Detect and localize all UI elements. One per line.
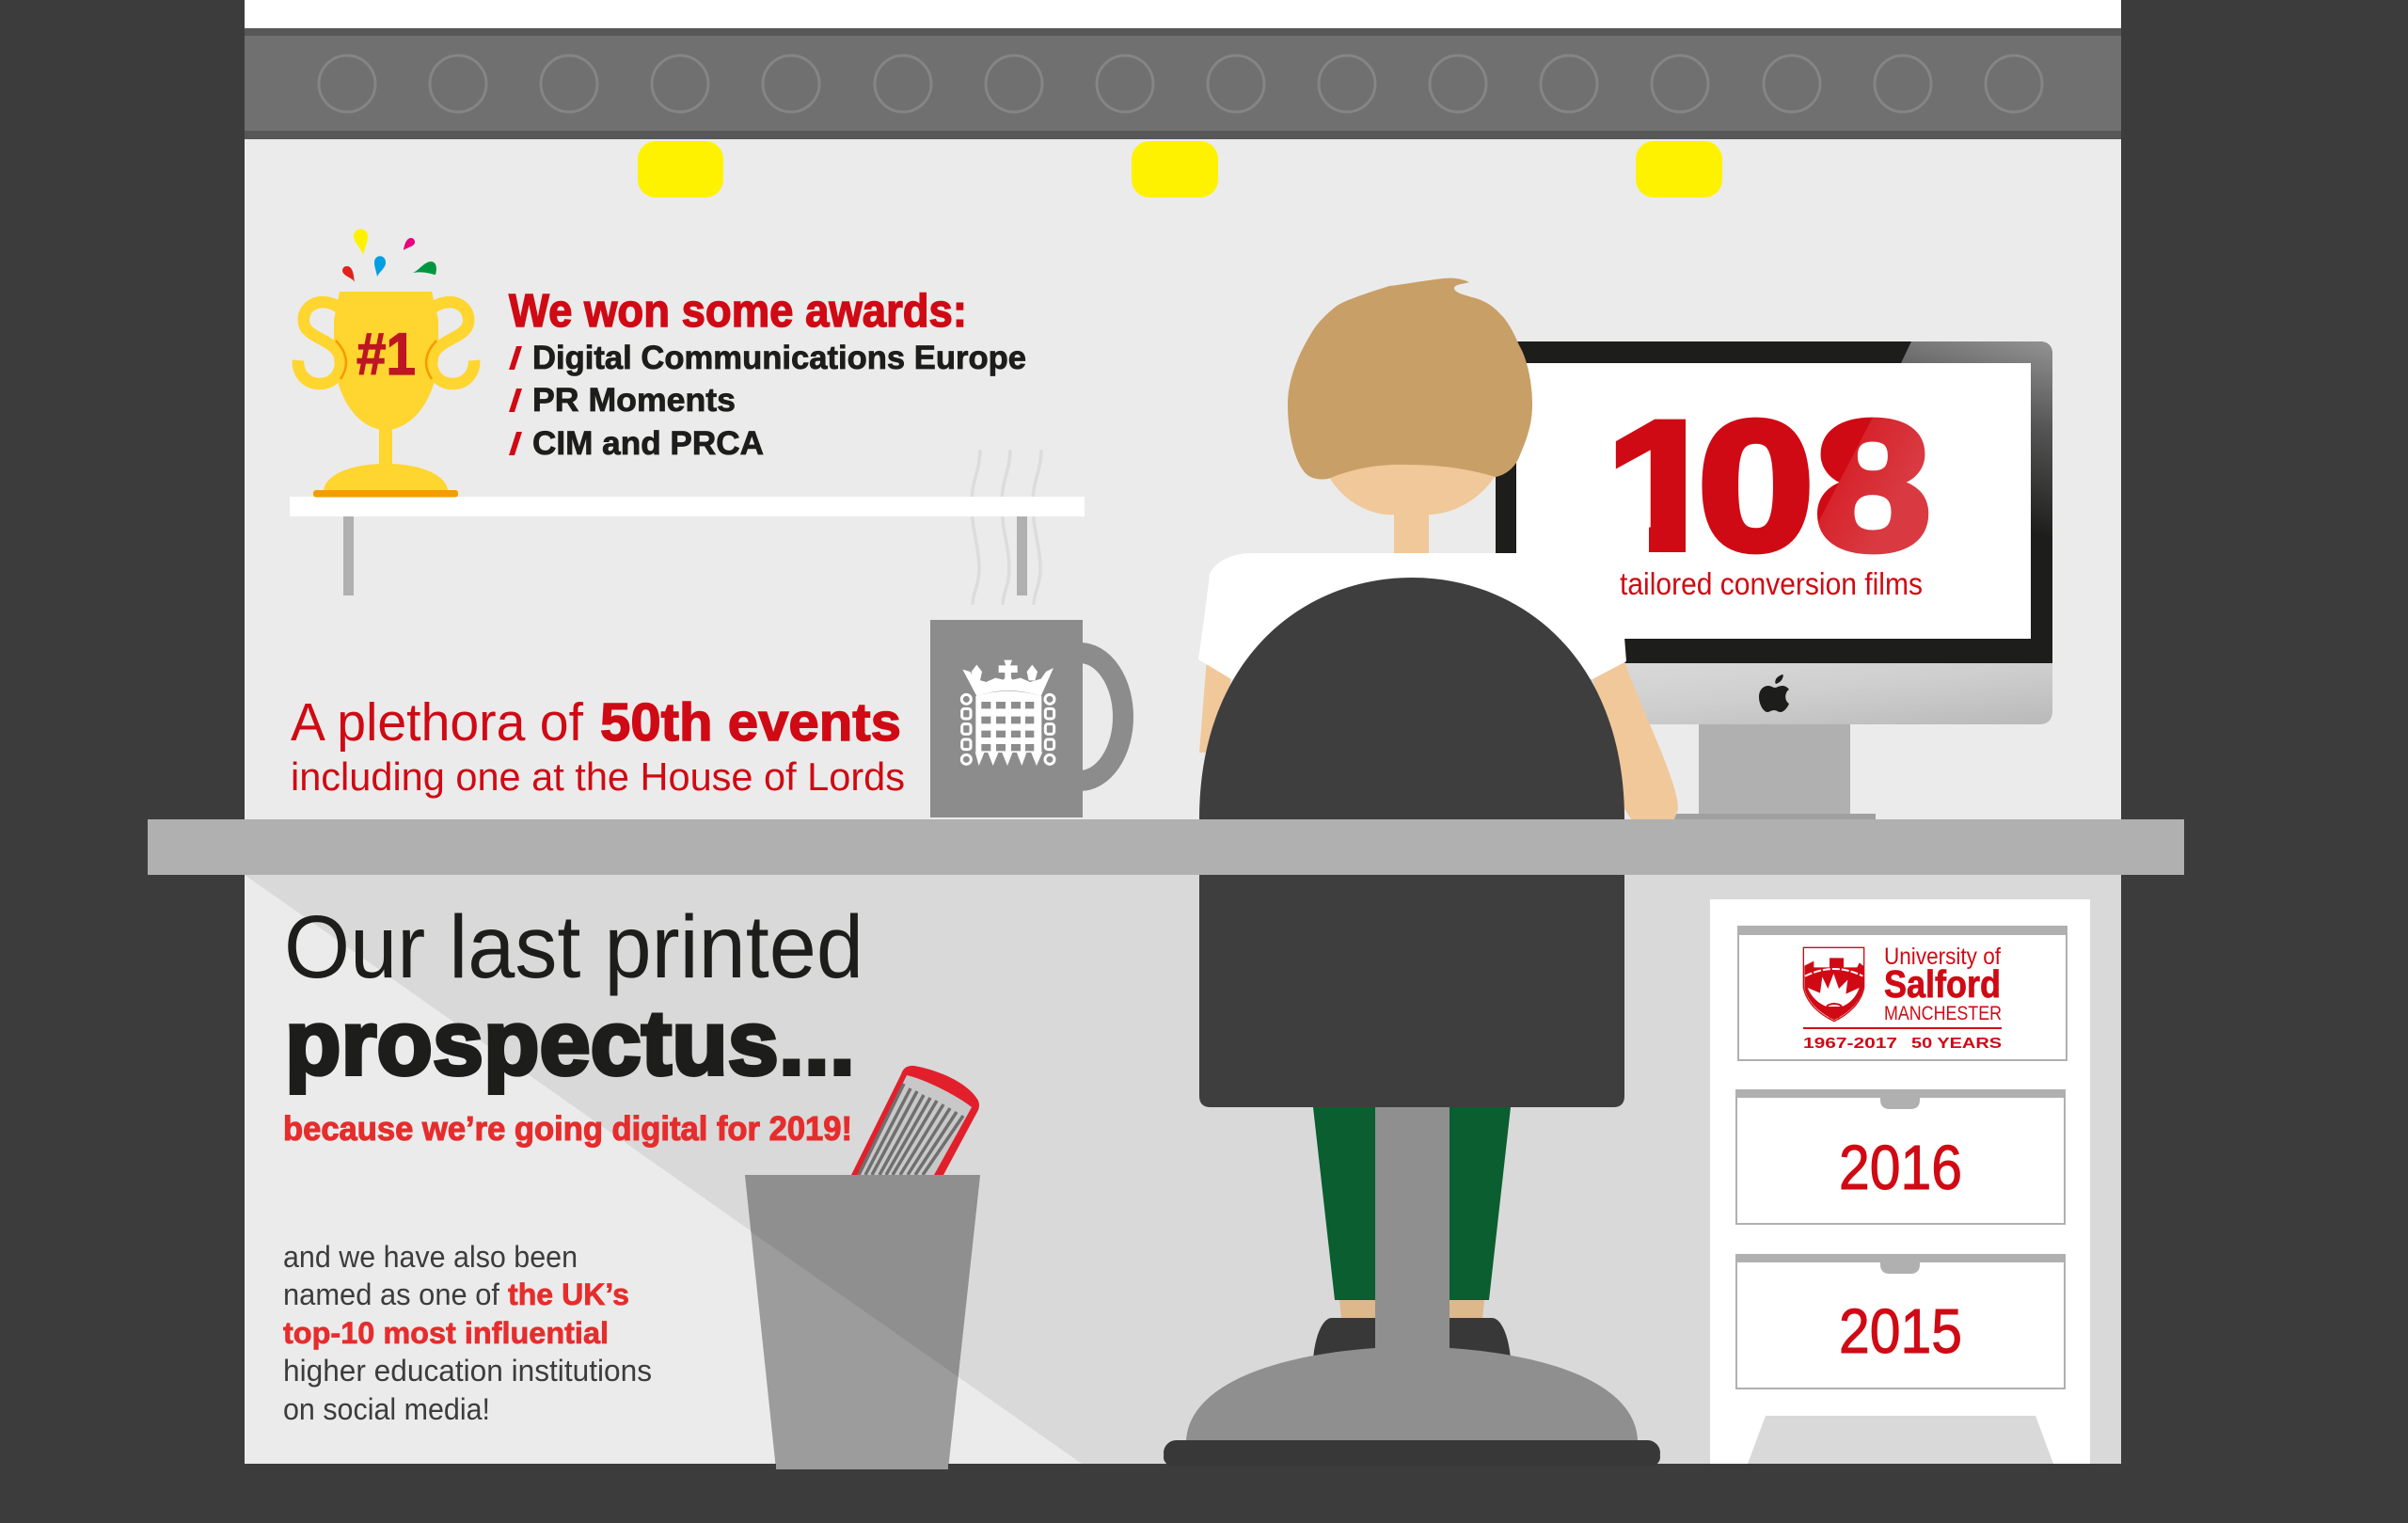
text: social media ranking: named as one of [283,1277,499,1311]
heading: awards: We won some awards: [509,286,967,337]
statistic: 108: 1 [1606,383,1722,589]
statistic: 108 [1616,418,1928,555]
icon: waste bin [745,1175,980,1469]
list: award names: PR Moments [532,382,736,419]
top white strip [245,0,2121,28]
drawer: 2016 [1735,1089,2066,1224]
caption: tailored conversion films: tailored conversion films [1620,566,1923,601]
list: award names: CIM and PRCA [532,425,764,462]
cabinet gap [1748,1416,2053,1464]
drawer: University of Salford logo: MANCHESTER [1884,1003,2002,1024]
icon: apple logo [1759,674,1789,712]
legs and shoes [1313,1107,1511,1359]
lower wall with light diagonal [245,875,2121,1464]
trophy label: #1 [356,322,416,388]
person at desk [1198,278,1678,819]
neck and head [1328,461,1496,555]
chair back and seat [1199,578,1624,1107]
statistic: 108: 08 [1698,383,1931,589]
ceiling lights [638,141,1722,198]
drawer: University of Salford logo: 50 YEARS [1911,1036,2002,1052]
icon: rolled prospectus [851,1066,979,1175]
text: 50th events [291,692,905,799]
hair [1288,278,1532,480]
drawer: 2015 [1735,1254,2066,1388]
panel: filing cabinet [1710,899,2090,1464]
text: social media ranking: and we have also been [283,1240,578,1274]
chair base bar and bin foot over floor [776,1449,1660,1469]
panel: office room wall [245,139,2121,1464]
subheading: going digital: because we’re going digital for 2019! [283,1109,852,1148]
icon: steam from mug [972,450,1041,605]
confetti [342,230,436,282]
list: award names [509,340,1026,462]
icon: mug with portcullis [930,620,1123,817]
drawer: University of Salford logo: 1967-2017 [1803,1036,1897,1052]
drawer: University of Salford logo [1737,926,2067,1060]
drawer: 2015: 2015 [1839,1296,1962,1367]
panel: ceiling beam with circles [245,28,2121,139]
text: 50th events: including one at the House of Lords [291,754,905,799]
logo: Salford shield [1803,947,1864,1022]
icon: trophy [298,230,474,497]
monitor [1496,341,2052,819]
floor [0,1464,2408,1523]
text: social media ranking: higher education institutions [283,1354,652,1388]
text: social media ranking: top-10 most influential [283,1316,609,1350]
arms [1199,658,1678,819]
t-shirt [1198,553,1626,679]
chair post and base [1164,1107,1660,1466]
drawer: University of Salford logo: Salford [1884,962,2001,1006]
text: social media ranking [283,1240,652,1426]
drawer: 2016: 2016 [1839,1133,1962,1203]
portcullis emblem [961,660,1054,766]
text: social media ranking: on social media! [283,1392,490,1426]
heading: last printed prospectus: Our last printed [284,897,863,997]
text: 50th events: A plethora of [291,692,583,753]
shelf [290,497,1085,595]
text: 50th events: 50th events [600,692,901,753]
heading: last printed prospectus [284,897,863,1094]
list: award names: Digital Communications Europe [532,340,1026,376]
text: social media ranking: the UK’s [508,1277,629,1311]
drawer: University of Salford logo: University of [1884,944,2001,970]
desk top [148,819,2184,875]
heading: last printed prospectus: prospectus... [285,992,855,1094]
